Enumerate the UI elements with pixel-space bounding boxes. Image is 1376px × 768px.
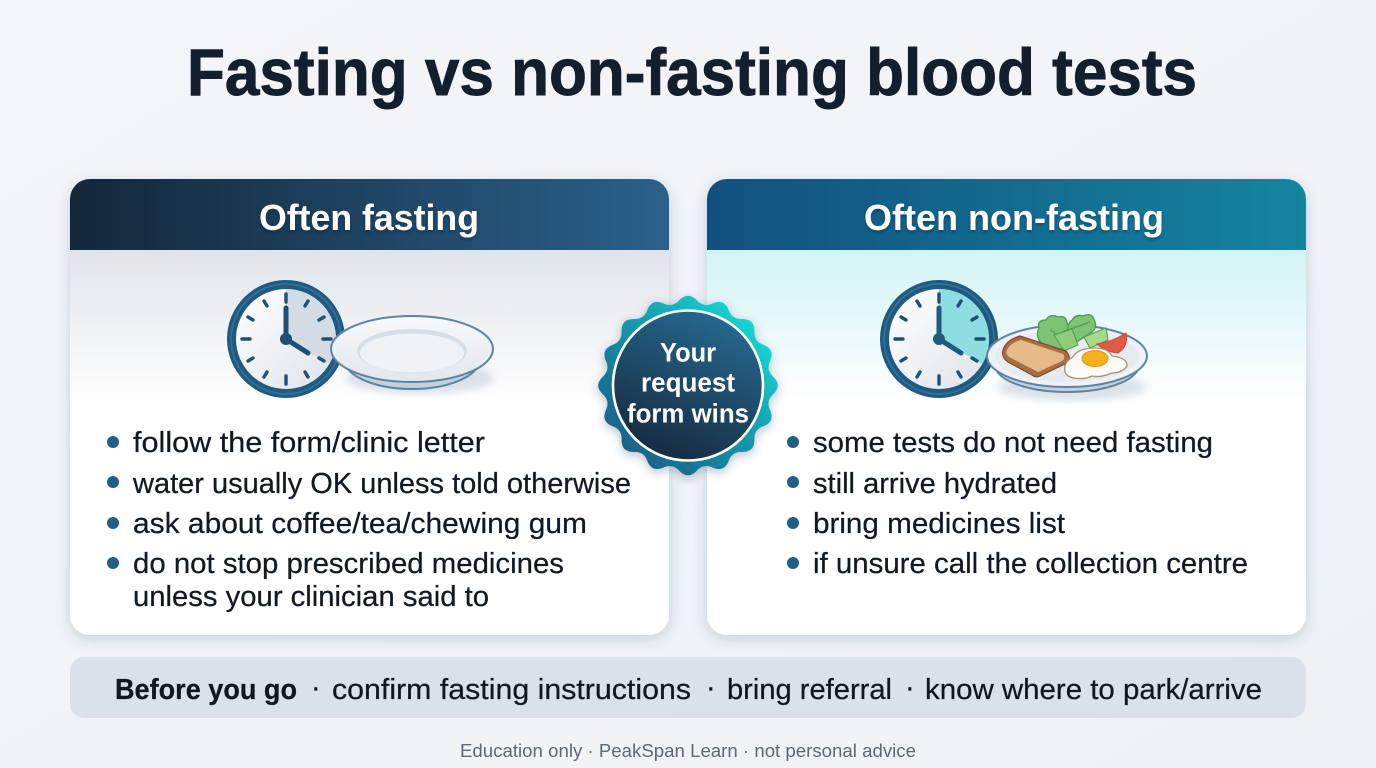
icon: clock with plate of food [880,280,1147,401]
badge: your request form wins: request [641,368,735,398]
list: non-fasting tips: bring medicines list [813,508,1065,540]
badge: your request form wins [598,296,778,475]
badge: your request form wins: form wins [627,398,749,428]
panel header: often non-fasting: Often non-fasting [864,197,1164,238]
panel: often non-fasting [707,179,1306,635]
checklist bar: before you go [70,657,1306,718]
checklist bar: before you go: · [706,672,716,704]
checklist bar: before you go: · [905,672,915,704]
list: fasting tips: ask about coffee/tea/chewing gum [133,508,587,540]
checklist bar: before you go: confirm fasting instructions [332,674,691,706]
badge: your request form wins: Your [660,338,716,368]
footer note: Education only · PeakSpan Learn · not personal advice [460,741,916,761]
panel header: often fasting: Often fasting [259,197,479,238]
checklist bar: before you go: know where to park/arrive [925,674,1262,706]
list: fasting tips: unless your clinician said to [133,581,489,613]
list: non-fasting tips [787,427,1248,580]
checklist bar: before you go: · [311,672,321,704]
list: fasting tips: do not stop prescribed medicines [133,548,564,580]
list: fasting tips: follow the form/clinic letter [133,427,485,459]
panel: often fasting [70,179,669,635]
list: non-fasting tips: some tests do not need fasting [813,427,1213,459]
panel header: often fasting [70,179,669,250]
checklist bar: before you go: Before you go [115,674,297,706]
title: Fasting vs non-fasting blood tests [187,35,1197,109]
list: fasting tips [107,427,631,613]
icon: clock with empty plate [227,280,494,398]
panel header: often non-fasting [707,179,1306,250]
list: fasting tips: water usually OK unless told otherwise [132,468,631,500]
list: non-fasting tips: still arrive hydrated [813,468,1057,500]
checklist bar: before you go: bring referral [727,674,892,706]
list: non-fasting tips: if unsure call the collection centre [813,548,1248,580]
